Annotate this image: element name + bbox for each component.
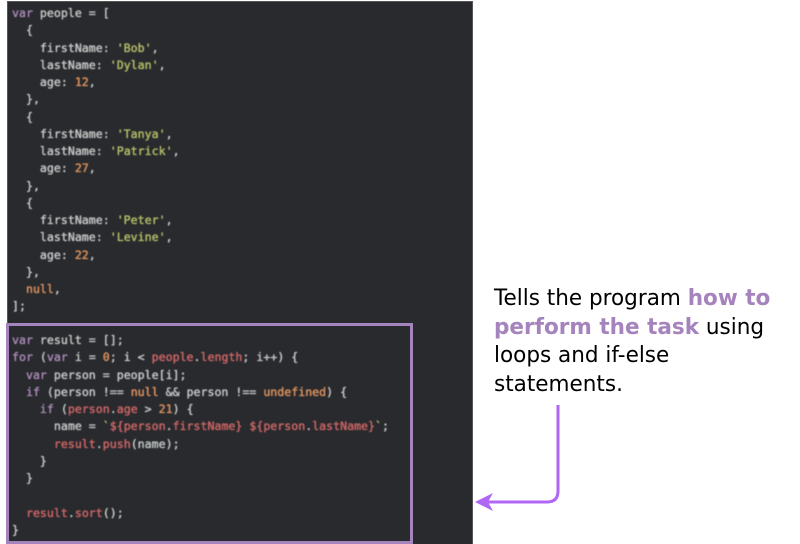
code block: loop and if-else logic: var result = []; for (var i = 0; i < people.length; i++) { var person = people[i]; if (person !== null && person !== undefined) { if (person.age > 21) { name = `${person.firstName} ${person.lastName}`; result.push(name); } } result.sort(); } [12,333,389,537]
code block: people data array: var people = [ { firstName: 'Bob', lastName: 'Dylan', age: 12, }, { firstName: 'Tanya', lastName: 'Patrick', age: 27, }, { firstName: 'Peter', lastName: 'Levine', age: 22, }, null, ]; [12,6,180,313]
arrow: from callout to highlighted code [475,405,560,511]
callout text [494,285,770,397]
callout text: Tells the program how to [494,285,770,311]
callout text: loops and if-else [494,342,669,368]
callout text: perform the task using [494,314,764,340]
callout text: statements. [494,371,623,397]
panel: code editor [7,1,473,544]
highlight box around imperative code [6,323,413,544]
